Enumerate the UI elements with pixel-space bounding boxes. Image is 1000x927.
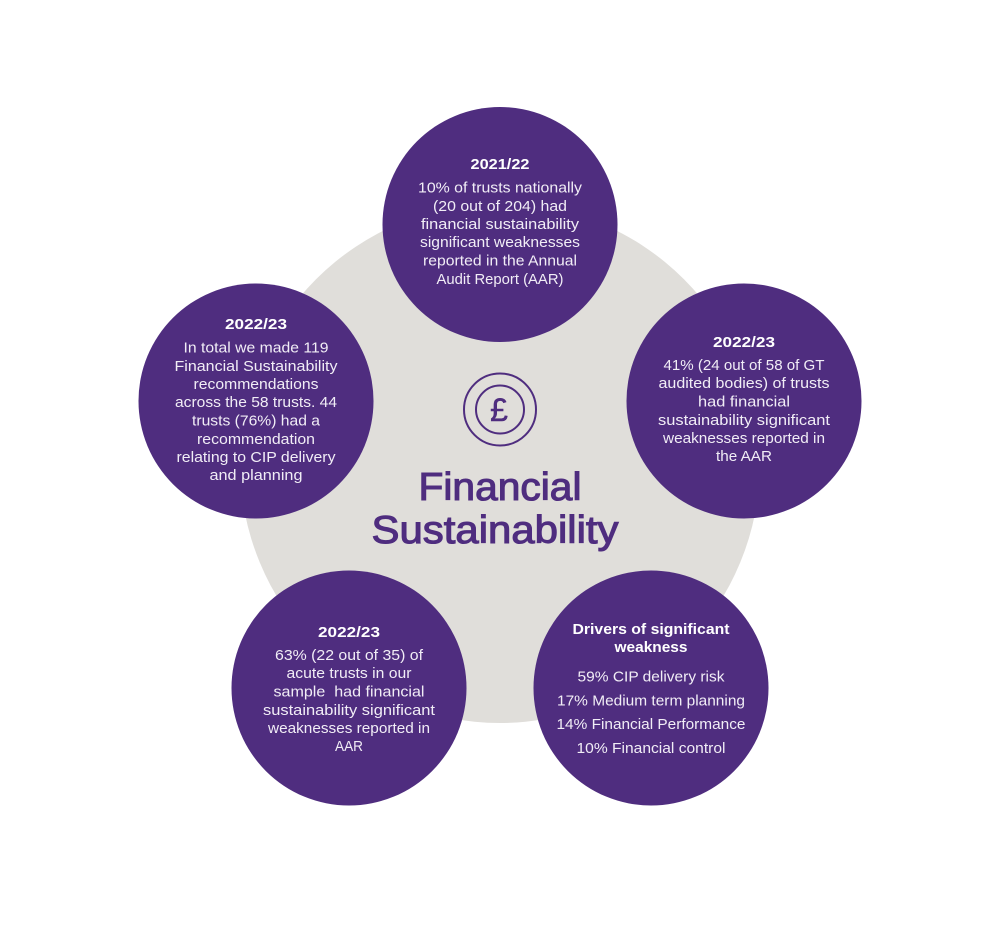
panel: right circle 2022/23 xyxy=(626,284,862,518)
heading: 2022/23: 2022/23 xyxy=(318,624,380,641)
text: list of drivers xyxy=(556,668,746,757)
panel: bottom left circle 2022/23 xyxy=(232,570,466,806)
text: recommendations made: across the 58 trusts. 44 xyxy=(175,394,337,411)
text: list of drivers: 59% CIP delivery risk xyxy=(578,668,725,686)
title: Financial xyxy=(418,466,582,509)
title xyxy=(372,466,619,552)
text: acute trusts sample xyxy=(263,647,436,755)
text: recommendations made: and planning xyxy=(210,467,302,484)
text: recommendations made: recommendation xyxy=(197,431,315,448)
text: GT audited bodies: weaknesses reported in xyxy=(662,430,825,447)
icon: pound coin xyxy=(464,374,536,446)
text: GT audited bodies: 41% (24 out of 58 of GT xyxy=(664,357,824,374)
text: recommendations made: relating to CIP delivery xyxy=(176,449,336,466)
icon: pound coin: £ xyxy=(490,392,508,428)
text: GT audited bodies: had financial xyxy=(698,394,790,410)
text: national share of trusts: reported in the Annual xyxy=(423,252,577,270)
panel: top circle 2021/22 xyxy=(382,107,618,342)
text: recommendations made: In total we made 119 xyxy=(184,340,328,356)
central title block xyxy=(372,374,619,552)
heading: drivers of significant weakness xyxy=(572,621,730,656)
heading: 2022/23: 2022/23 xyxy=(713,334,775,351)
text: list of drivers: 10% Financial control xyxy=(576,740,726,757)
text: acute trusts sample: sustainability significant xyxy=(263,702,436,719)
text: acute trusts sample: weaknesses reported in xyxy=(267,720,430,737)
text: acute trusts sample: 63% (22 out of 35) of xyxy=(275,647,424,664)
heading: 2022/23: 2022/23 xyxy=(225,316,287,333)
text: national share of trusts xyxy=(418,180,583,288)
title: Sustainability xyxy=(372,509,619,552)
text: national share of trusts: (20 out of 204) had xyxy=(433,198,567,215)
text: national share of trusts: Audit Report (AAR) xyxy=(436,271,564,288)
background grey circle xyxy=(240,203,760,723)
text: acute trusts sample: AAR xyxy=(335,738,363,755)
heading: 2021/22: 2021/22 xyxy=(470,156,530,173)
text: GT audited bodies xyxy=(658,357,831,465)
heading: drivers of significant weakness: Drivers of significant xyxy=(572,621,730,638)
text: list of drivers: 17% Medium term planning xyxy=(557,692,745,710)
text: national share of trusts: significant weaknesses xyxy=(420,234,580,251)
text: national share of trusts: 10% of trusts nationally xyxy=(418,180,583,196)
text: recommendations made: recommendations xyxy=(194,376,318,393)
text: national share of trusts: financial sustainability xyxy=(421,216,580,233)
text: acute trusts sample: sample had financial xyxy=(274,684,424,700)
text: list of drivers: 14% Financial Performance xyxy=(556,716,746,733)
text: recommendations made: trusts (76%) had a xyxy=(192,412,321,430)
text: GT audited bodies: sustainability significant xyxy=(658,412,831,429)
text: recommendations made xyxy=(174,340,338,484)
text: recommendations made: Financial Sustainability xyxy=(174,358,338,375)
panel: bottom right circle drivers xyxy=(534,570,768,806)
text: GT audited bodies: audited bodies) of trusts xyxy=(658,375,830,392)
heading: drivers of significant weakness: weakness xyxy=(613,639,688,656)
text: GT audited bodies: the AAR xyxy=(716,448,772,465)
text: acute trusts sample: acute trusts in our xyxy=(286,665,412,682)
panel: left circle 2022/23 xyxy=(138,284,374,518)
